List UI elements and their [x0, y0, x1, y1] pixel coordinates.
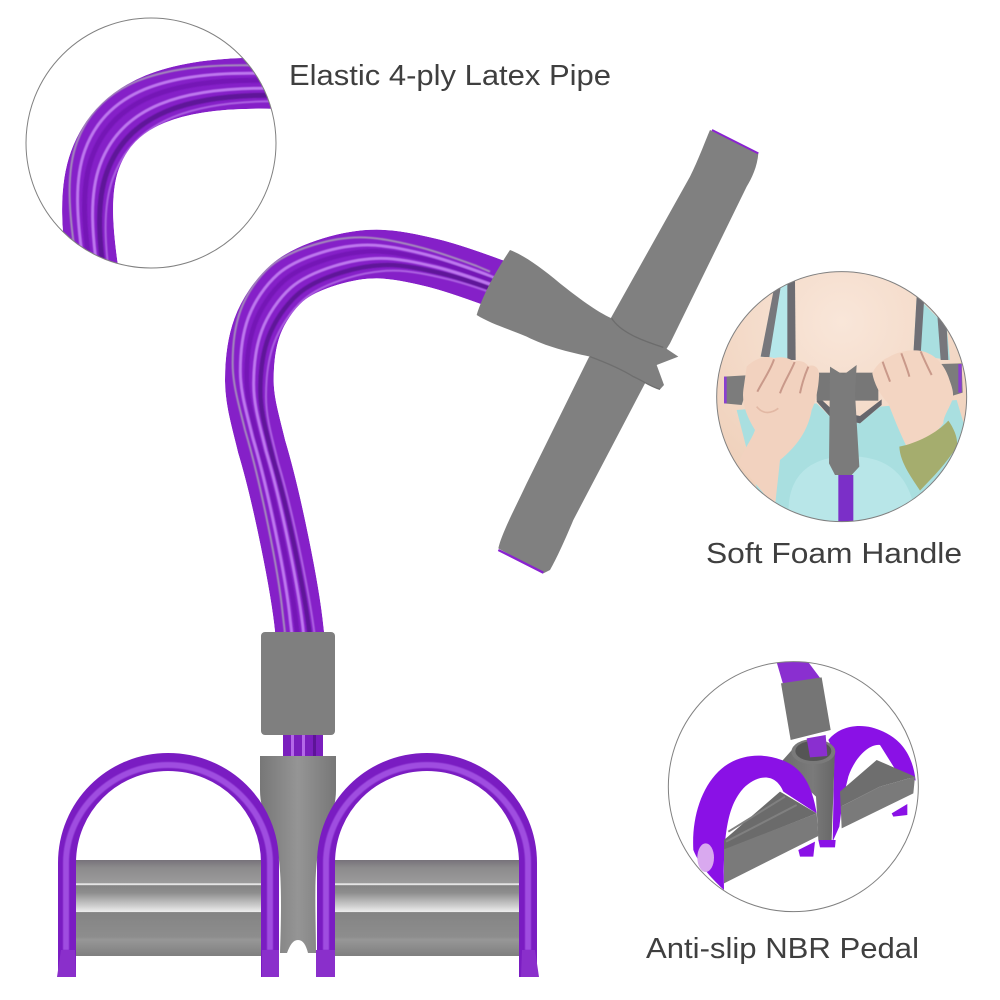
right roller	[333, 860, 523, 956]
pedal lens	[697, 843, 714, 872]
right pedal strap	[828, 726, 916, 842]
central stem	[829, 365, 859, 475]
right pedal roller	[840, 760, 915, 828]
right pedal arch	[316, 762, 539, 977]
tube top	[776, 662, 820, 684]
left pedal arch	[57, 762, 279, 977]
label: latex pipe: Elastic 4-ply Latex Pipe	[289, 60, 611, 92]
pedal base	[260, 756, 336, 953]
inset circle: hands gripping foam handle	[717, 272, 967, 527]
left pedal roller	[724, 792, 818, 883]
handle grip	[724, 363, 963, 405]
inset circle: latex pipe detail	[26, 18, 276, 268]
left pedal strap	[693, 756, 817, 890]
foam sleeve	[781, 677, 831, 740]
handle connector	[477, 250, 678, 389]
shoulder straps	[761, 280, 950, 423]
main product: purple latex tube	[225, 230, 504, 632]
label: foam handle: Soft Foam Handle	[706, 538, 962, 570]
inset circle: anti-slip pedal	[668, 660, 918, 912]
left roller	[73, 860, 263, 956]
pedal base T	[780, 739, 835, 840]
pedal feet	[798, 804, 907, 857]
tube segment between sleeve and base	[283, 730, 323, 760]
purple tube	[838, 475, 853, 525]
green wrist sleeve	[899, 421, 957, 491]
foam handle bar	[498, 130, 758, 573]
teal sports top	[737, 400, 967, 527]
inner tube	[807, 735, 827, 757]
right hand	[872, 350, 953, 450]
label: pedal: Anti-slip NBR Pedal	[646, 933, 919, 965]
foam sleeve on tube	[261, 632, 335, 735]
left hand	[738, 357, 819, 507]
